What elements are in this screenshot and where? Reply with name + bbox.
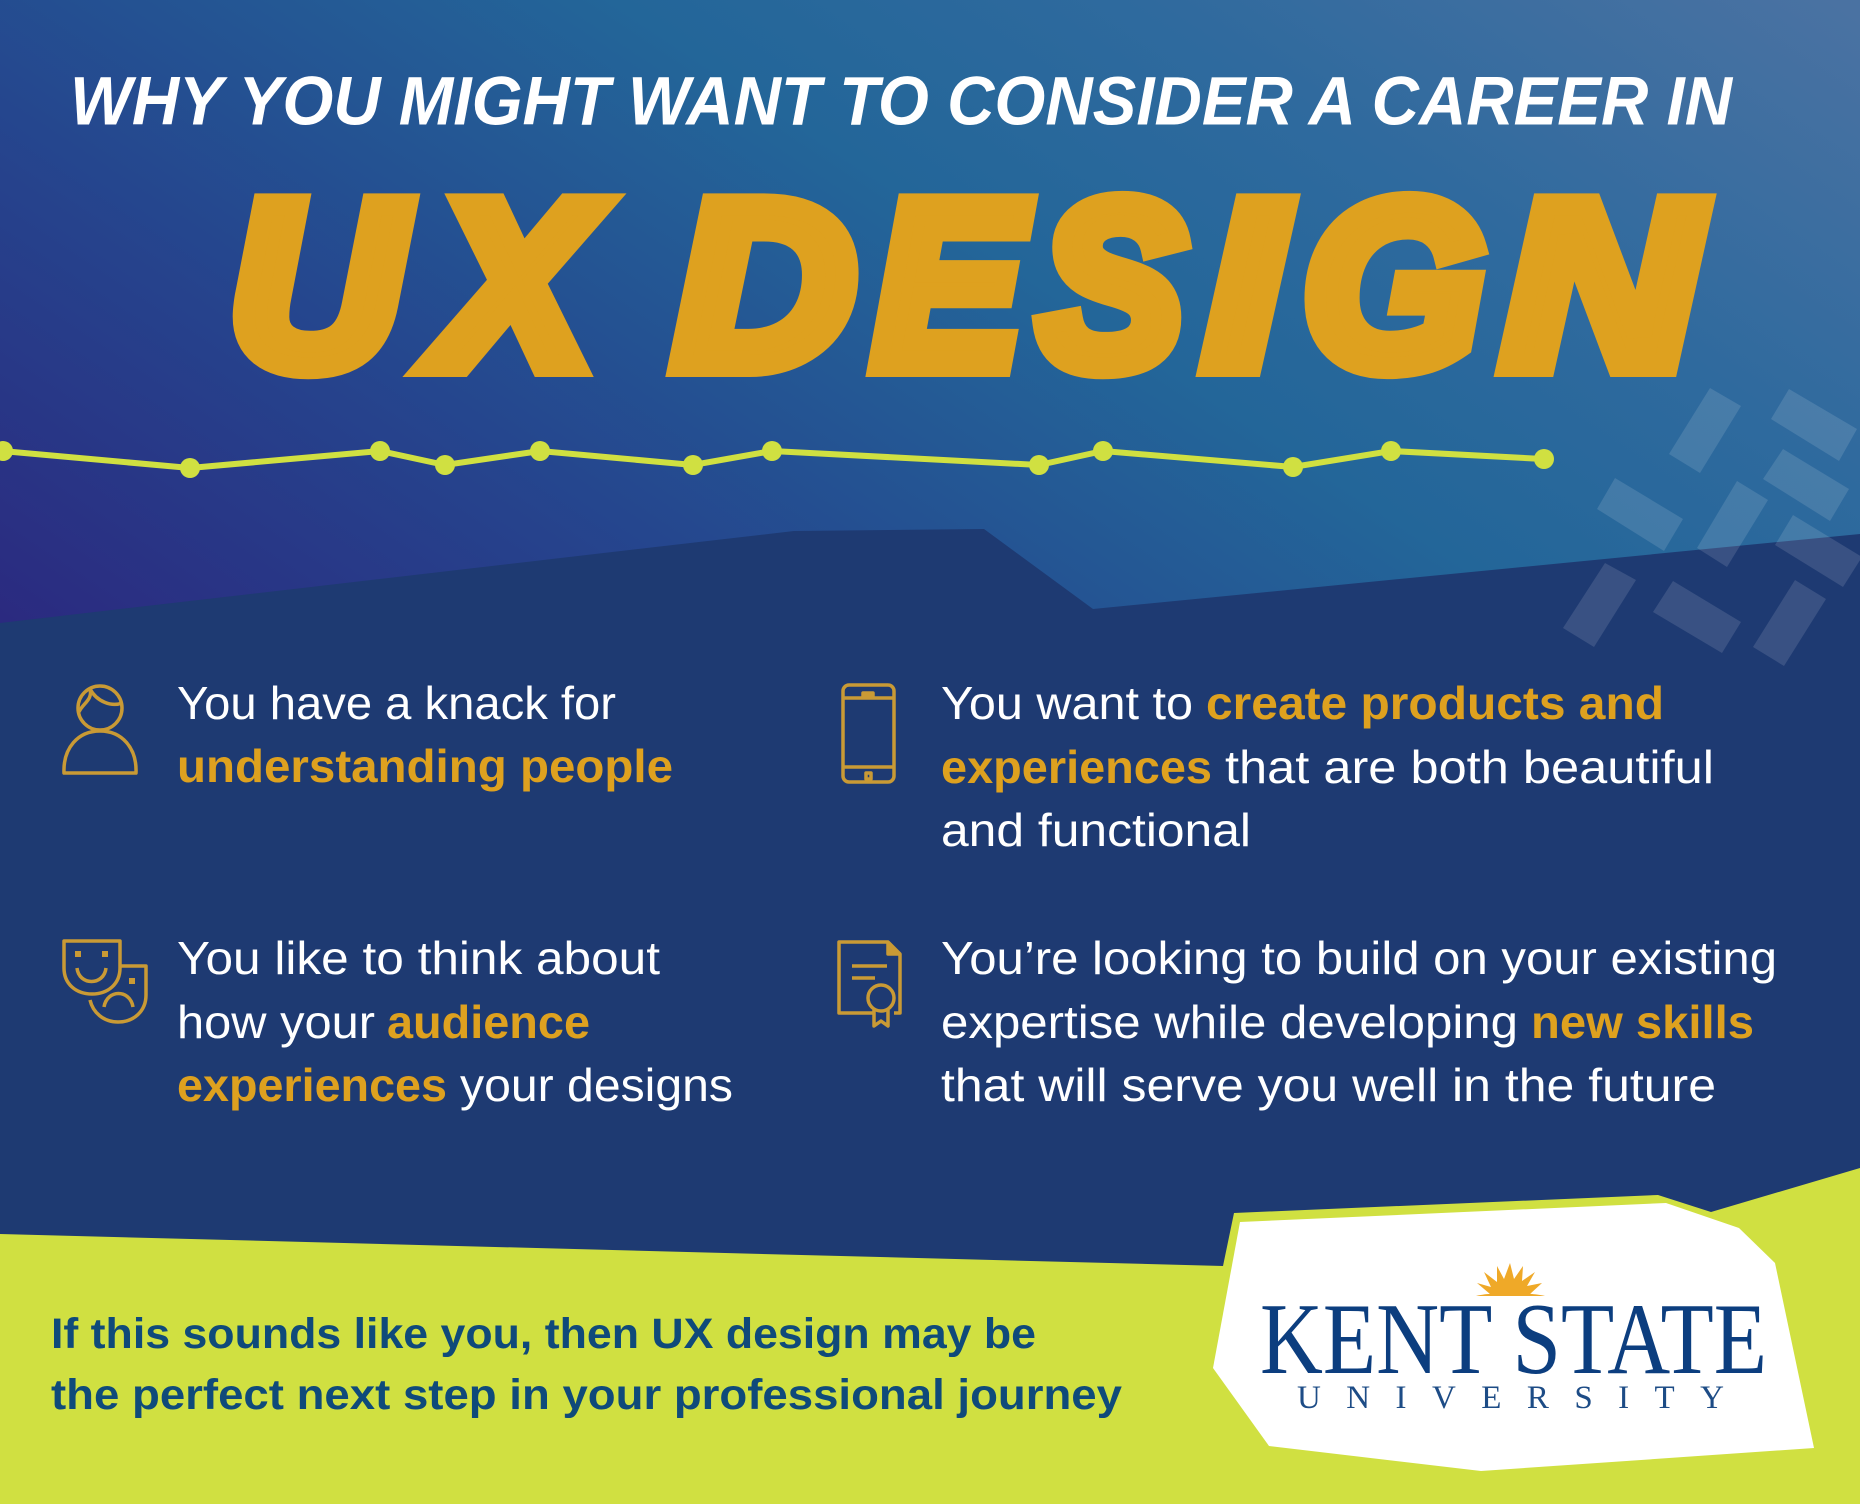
- title: UX design: E: [874, 153, 1027, 416]
- Kent State University logo: UNIVERSITY: [1297, 1380, 1724, 1416]
- text: understanding people: You have a knack for: [177, 677, 616, 729]
- text: audience experiences: [177, 932, 733, 1111]
- text: create products and experiences: [941, 677, 1714, 856]
- icon: theatre masks: [64, 941, 146, 1022]
- white logo panel: [1213, 1203, 1814, 1471]
- journey line chart: [0, 441, 1554, 478]
- title: UX design: N: [1504, 153, 1702, 416]
- text: new skills: expertise while developing: [941, 996, 1518, 1048]
- icon: smartphone: [843, 685, 894, 782]
- text: understanding people: [177, 677, 673, 792]
- Kent State University logo: KENT STATE: [1260, 1283, 1767, 1396]
- title: why you might want: WHY YOU MIGHT WANT TO CONSIDER A CAREER IN: [70, 62, 1734, 140]
- title: UX design: I: [1206, 153, 1286, 416]
- decorative angled bar pattern: [1563, 388, 1860, 666]
- text: audience experiences: audience: [387, 996, 590, 1048]
- title: UX design: [230, 153, 1702, 416]
- title: UX design: S: [1040, 153, 1183, 416]
- text: new skills: [941, 932, 1777, 1111]
- closing statement: [51, 1310, 1122, 1419]
- text: create products and experiences: You want to: [941, 677, 1193, 729]
- text: new skills: that will serve you well in the future: [941, 1059, 1716, 1111]
- text: understanding people: understanding people: [177, 740, 673, 792]
- title: UX design: G: [1304, 153, 1483, 416]
- gradient header background: [0, 0, 1860, 700]
- text: audience experiences: experiences: [177, 1059, 447, 1111]
- text: audience experiences: your designs: [460, 1059, 733, 1111]
- text: audience experiences: how your: [177, 996, 375, 1048]
- text: create products and experiences: that are both beautiful: [1225, 741, 1714, 793]
- icon: certificate: [839, 942, 900, 1026]
- title: UX design: X: [426, 153, 603, 416]
- closing statement: If this sounds like you, then UX design may be: [51, 1310, 1036, 1358]
- text: create products and experiences: experiences: [941, 741, 1212, 793]
- text: new skills: You’re looking to build on your existing: [941, 932, 1777, 984]
- text: new skills: new skills: [1531, 996, 1754, 1048]
- title: UX design: D: [675, 153, 854, 416]
- green footer band: [0, 1168, 1860, 1504]
- closing statement: the perfect next step in your professional journey: [51, 1371, 1122, 1419]
- Kent State University logo: [1260, 1263, 1767, 1416]
- icon: sun: [1476, 1263, 1545, 1296]
- icon: person: [64, 686, 136, 773]
- text: audience experiences: You like to think about: [177, 932, 660, 984]
- text: create products and experiences: and functional: [941, 804, 1251, 856]
- title: UX design: U: [230, 153, 407, 416]
- text: create products and experiences: create products and: [1206, 677, 1664, 729]
- navy content panel: [0, 529, 1860, 1504]
